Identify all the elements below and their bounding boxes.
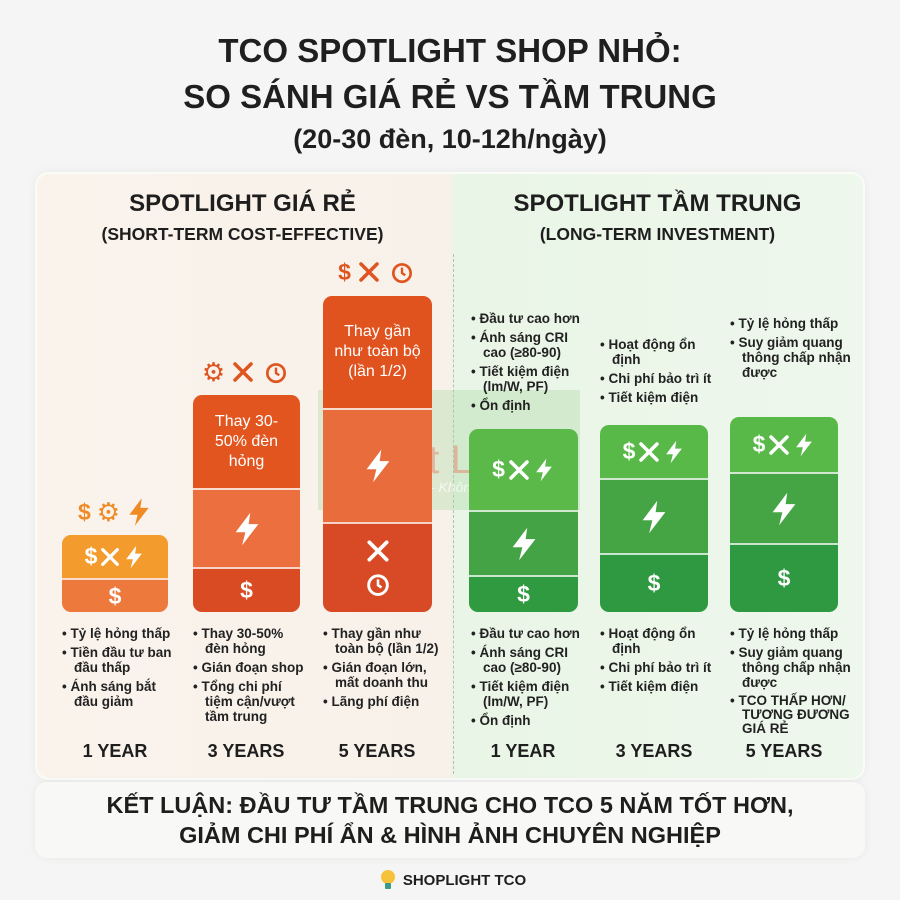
notes: mid 3 years top: • Hoạt động ổn định (600, 337, 695, 367)
notes: cheap 3 years: • Tổng chi phí tiệm cận/vượt tầm trung (193, 679, 295, 724)
icons: year5 cheap (338, 258, 412, 284)
notes: mid 5 years top: • Suy giảm quang thông chấp nhận được (730, 335, 851, 380)
bar: mid 1 year (469, 429, 578, 612)
bar: cheap 5 years: Thay gần (344, 323, 411, 340)
notes: cheap 3 years (193, 626, 303, 724)
notes: mid 5 years top: • Tỷ lệ hỏng thấp (730, 316, 838, 331)
year labels: 1 YEAR (491, 741, 555, 761)
bar: cheap 3 years: hỏng (229, 452, 264, 470)
notes: mid 5 years: • TCO THẤP HƠN/ TƯƠNG ĐƯƠNG GIÁ RẺ (730, 693, 850, 736)
bar: mid 3 years: $ (648, 570, 660, 596)
icons: year3 cheap (202, 356, 286, 386)
title: TCO SPOTLIGHT SHOP NHỎ: (218, 32, 682, 69)
panel: comparison (35, 172, 865, 780)
footer: SHOPLIGHT TCO (403, 872, 526, 888)
bar: cheap 3 years (193, 395, 300, 612)
bar: cheap 5 years (323, 296, 432, 612)
watermark: Đèn chuẩn - Không gian chất (358, 479, 540, 495)
heading: spotlight tam trung: (LONG-TERM INVESTMENT) (540, 224, 775, 244)
year labels: 1 YEAR (83, 741, 147, 761)
title: SO SÁNH GIÁ RẺ VS TẦM TRUNG (183, 78, 717, 115)
year labels: 5 YEARS (339, 741, 415, 761)
heading: spotlight tam trung: SPOTLIGHT TẦM TRUNG (514, 190, 801, 217)
notes: cheap 5 years: • Lãng phí điện (323, 694, 419, 709)
notes: mid 1 year: • Đầu tư cao hơn (471, 626, 580, 641)
notes: cheap 1 year: • Tiền đầu tư ban đầu thấp (62, 645, 172, 675)
notes: mid 1 year (471, 626, 580, 728)
icons: year3 cheap: ⚙ (202, 356, 225, 386)
bar: mid 1 year: $ (517, 581, 530, 607)
notes: mid 1 year top: • Ánh sáng CRI cao (≥80-90) (471, 330, 568, 360)
bar: cheap 3 years: Thay 30- (215, 412, 278, 430)
bar: cheap 1 year (62, 535, 168, 612)
bar: cheap 1 year: $ (109, 582, 121, 608)
notes: mid 1 year top (471, 311, 580, 413)
notes: mid 3 years top (600, 337, 712, 405)
icons: year1 cheap (78, 496, 148, 526)
notes: mid 5 years: • Suy giảm quang thông chấp nhận được (730, 645, 851, 690)
notes: cheap 1 year: • Ánh sáng bắt đầu giảm (62, 679, 156, 709)
notes: mid 1 year top: • Đầu tư cao hơn (471, 311, 580, 326)
bar: mid 5 years (730, 417, 838, 612)
year labels: 3 YEARS (208, 741, 284, 761)
notes: mid 1 year: • Ánh sáng CRI cao (≥80-90) (471, 645, 568, 675)
heading: spotlight gia re: SPOTLIGHT GIÁ RẺ (129, 190, 356, 217)
notes: mid 5 years (730, 626, 851, 736)
title: (20-30 đèn, 10-12h/ngày) (293, 124, 607, 154)
notes: cheap 1 year: • Tỷ lệ hỏng thấp (62, 626, 170, 641)
notes: mid 3 years: • Hoạt động ổn định (600, 626, 695, 656)
notes: mid 1 year: • Ổn định (471, 713, 530, 728)
notes: mid 3 years top: • Chi phí bảo trì ít (600, 371, 711, 386)
notes: mid 5 years: • Tỷ lệ hỏng thấp (730, 626, 838, 641)
notes: cheap 5 years (323, 626, 439, 709)
notes: cheap 3 years: • Thay 30-50% đèn hỏng (193, 626, 283, 656)
heading: spotlight tam trung (514, 190, 801, 244)
conclusion box: KẾT LUẬN: ĐẦU TƯ TẦM TRUNG CHO TCO 5 NĂM TỐT HƠN, (106, 792, 794, 818)
bar: mid 5 years: $ (778, 565, 790, 591)
notes: mid 1 year top: • Tiết kiệm điện (lm/W, PF) (471, 364, 569, 394)
icons: year1 cheap: ⚙ (97, 496, 120, 526)
bar: cheap 3 years: $ (240, 577, 253, 603)
year labels: 5 YEARS (746, 741, 822, 761)
conclusion box (35, 782, 865, 858)
heading: spotlight gia re (102, 189, 383, 244)
notes: mid 3 years: • Chi phí bảo trì ít (600, 660, 711, 675)
notes: cheap 5 years: • Gián đoạn lớn, mất doanh thu (323, 660, 428, 690)
bar: mid 3 years (600, 425, 708, 612)
bar: cheap 5 years: (lần 1/2) (348, 363, 407, 380)
heading: spotlight gia re: (SHORT-TERM COST-EFFECTIVE) (102, 224, 383, 244)
notes: cheap 5 years: • Thay gần như toàn bộ (lần 1/2) (323, 626, 439, 656)
bar: cheap 5 years: như toàn bộ (334, 343, 421, 360)
icons: year1 cheap: $ (78, 498, 91, 524)
watermark (318, 390, 580, 510)
watermark: Tuyết Lights (341, 438, 557, 482)
bar: mid 3 years: $ (623, 438, 635, 464)
notes: cheap 3 years: • Gián đoạn shop (193, 660, 303, 675)
bar: mid 5 years: $ (753, 431, 765, 457)
bar: cheap 3 years: 50% đèn (215, 432, 278, 450)
notes: mid 3 years: • Tiết kiệm điện (600, 679, 698, 694)
year labels: 3 YEARS (616, 741, 692, 761)
conclusion box: GIẢM CHI PHÍ ẨN & HÌNH ẢNH CHUYÊN NGHIỆP (179, 822, 721, 848)
notes: cheap 1 year (62, 626, 172, 709)
bar: mid 1 year: $ (492, 456, 505, 482)
title (183, 32, 717, 154)
notes: mid 3 years top: • Tiết kiệm điện (600, 390, 698, 405)
bar: cheap 1 year: $ (85, 543, 97, 569)
year labels (83, 741, 822, 761)
notes: mid 3 years (600, 626, 712, 694)
notes: mid 1 year: • Tiết kiệm điện (lm/W, PF) (471, 679, 569, 709)
icons: year5 cheap: $ (338, 258, 351, 284)
notes: mid 1 year top: • Ổn định (471, 398, 530, 413)
